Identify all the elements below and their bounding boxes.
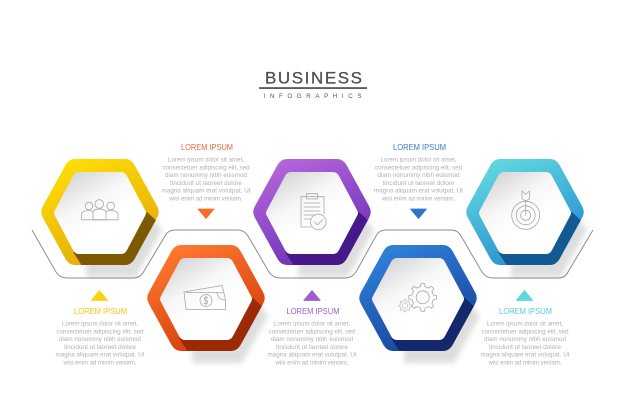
text block: purple: Lorem ipsum dolor sit amet, bbox=[274, 320, 350, 328]
title: INFOGRAPHICS bbox=[264, 93, 362, 100]
text block: yellow: tincidunt ut laoreet dolore bbox=[64, 344, 136, 351]
text block: yellow: LOREM IPSUM bbox=[74, 306, 127, 316]
text block: purple: tincidunt ut laoreet dolore bbox=[276, 344, 348, 351]
text block: blue: diam nonummy nibh euismod bbox=[378, 172, 460, 179]
text block: teal: tincidunt ut laoreet dolore bbox=[489, 344, 561, 351]
infographic canvas bbox=[32, 72, 594, 366]
hexagon: blue gears bbox=[359, 245, 480, 363]
text block: orange: LOREM IPSUM bbox=[181, 142, 233, 152]
text block: orange: diam nonummy nibh euismod bbox=[165, 172, 247, 179]
text block: blue: Lorem ipsum dolor sit amet, bbox=[380, 156, 457, 164]
icon: gears bbox=[399, 283, 437, 312]
text block: purple: LOREM IPSUM bbox=[286, 306, 340, 316]
text block: purple bbox=[268, 290, 357, 366]
text block: teal bbox=[480, 290, 570, 366]
text block: teal: LOREM IPSUM bbox=[499, 306, 552, 316]
text block: blue: tincidunt ut laoreet dolore bbox=[382, 180, 455, 187]
hexagon: yellow team bbox=[41, 159, 162, 277]
icon: banknotes bbox=[184, 286, 226, 310]
text block: orange: consectetuer adipiscing elit, sed bbox=[162, 164, 250, 171]
text block: purple: magna aliquam erat volutpat. Ut bbox=[268, 352, 357, 359]
text block: yellow: wisi enim ad minim veniam, bbox=[63, 360, 137, 366]
text block: yellow: magna aliquam erat volutpat. Ut bbox=[56, 352, 145, 359]
text block: purple: wisi enim ad minim veniam, bbox=[275, 360, 349, 366]
text block: yellow: diam nonummy nibh euismod bbox=[59, 336, 141, 343]
text block: purple: consectetuer adipiscing elit, sed bbox=[268, 328, 356, 335]
hexagon: orange money bbox=[147, 245, 268, 363]
hexagon: teal target bbox=[466, 159, 587, 277]
text block: orange: magna aliquam erat volutpat. Ut bbox=[162, 188, 251, 195]
text block: yellow: Lorem ipsum dolor sit amet, bbox=[62, 320, 138, 328]
icon: clipboard bbox=[301, 194, 326, 230]
text block: blue: magna aliquam erat volutpat. Ut bbox=[374, 188, 463, 195]
text block: teal: consectetuer adipiscing elit, sed bbox=[482, 328, 569, 335]
text block: blue: consectetuer adipiscing elit, sed bbox=[375, 164, 462, 171]
text block: yellow bbox=[56, 290, 145, 366]
hexagon: purple checklist bbox=[253, 159, 374, 277]
text block: blue bbox=[374, 142, 463, 218]
text block: yellow: consectetuer adipiscing elit, sed bbox=[56, 328, 144, 335]
title bbox=[259, 68, 367, 100]
text block: blue: LOREM IPSUM bbox=[393, 142, 446, 152]
title: BUSINESS bbox=[265, 68, 362, 88]
text block: teal: wisi enim ad minim veniam, bbox=[488, 360, 562, 366]
text block: teal: Lorem ipsum dolor sit amet, bbox=[487, 320, 563, 328]
text block: purple: diam nonummy nibh euismod bbox=[271, 336, 353, 343]
text block: teal: diam nonummy nibh euismod bbox=[484, 336, 566, 343]
connector line bbox=[32, 230, 593, 278]
text block: orange: Lorem ipsum dolor sit amet, bbox=[168, 156, 244, 164]
text block: blue: wisi enim ad minim veniam, bbox=[381, 196, 455, 202]
text block: orange: tincidunt ut laoreet dolore bbox=[170, 180, 242, 187]
text block: orange bbox=[162, 142, 251, 218]
icon: people bbox=[82, 200, 118, 220]
icon: target bbox=[512, 191, 540, 229]
text block: teal: magna aliquam erat volutpat. Ut bbox=[480, 352, 570, 359]
text block: orange: wisi enim ad minim veniam, bbox=[169, 196, 243, 202]
